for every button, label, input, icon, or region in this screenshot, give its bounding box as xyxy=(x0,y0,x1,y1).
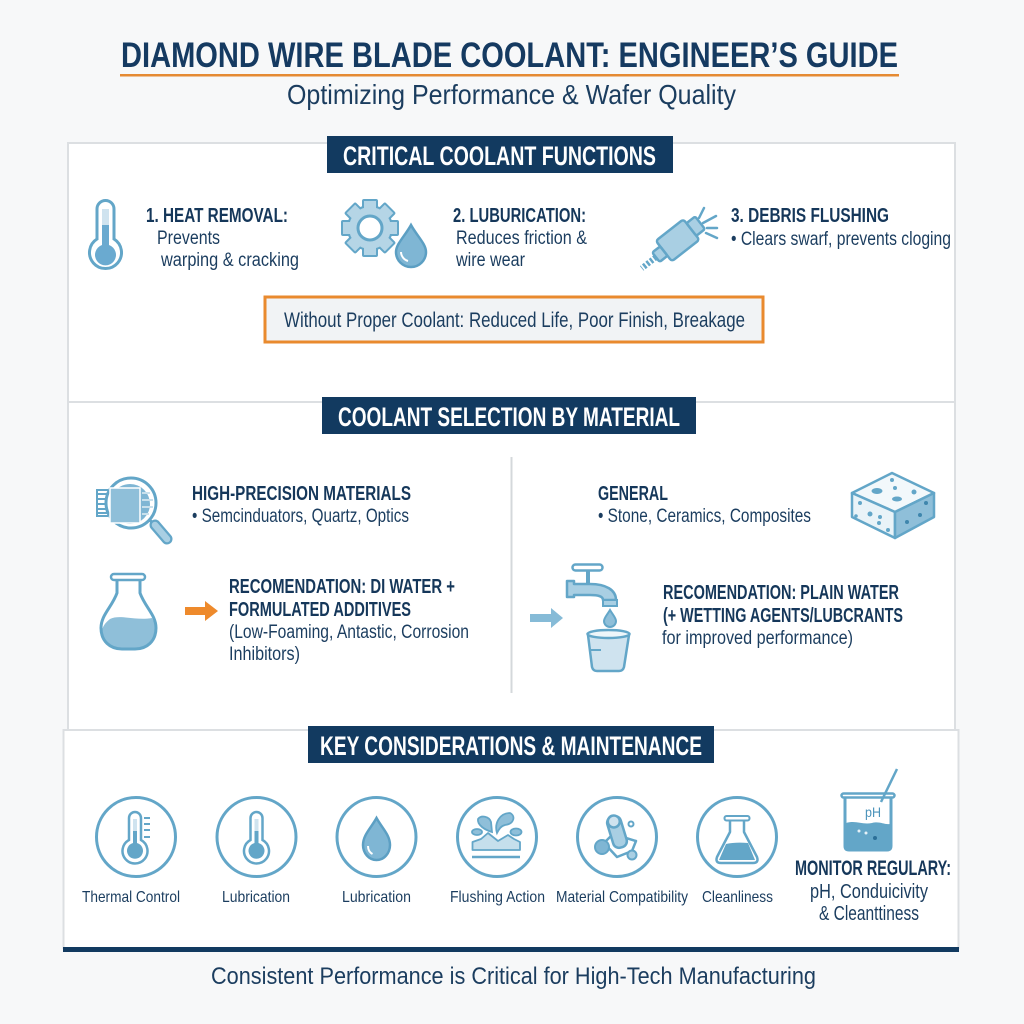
icon: thermometer xyxy=(90,200,122,269)
text: monitor regularly: & Cleanttiness xyxy=(819,903,919,925)
icon: gear and droplet xyxy=(343,201,426,267)
text: general: • Stone, Ceramics, Composites xyxy=(598,506,811,527)
text: recommendation plain water: for improved performance) xyxy=(662,628,853,649)
panel: key considerations and maintenance xyxy=(63,726,959,952)
text: heat removal: warping & cracking xyxy=(160,250,299,271)
item: cleanliness xyxy=(698,798,776,906)
text: debris flushing: • Clears swarf, prevents cloging xyxy=(731,229,951,250)
panel bottom bar xyxy=(63,947,959,952)
text: monitor regularly: MONITOR REGULARY: xyxy=(795,857,951,880)
text: monitor regularly: pH, Conduicivity xyxy=(810,881,928,903)
header: title and subtitle xyxy=(120,36,899,110)
panel box: selection xyxy=(68,402,955,730)
arrow: orange xyxy=(185,601,218,621)
arrow: blue xyxy=(530,608,563,628)
subtitle: Optimizing Performance & Wafer Quality xyxy=(287,79,736,110)
text: monitor regularly xyxy=(795,857,951,925)
panel: critical coolant functions xyxy=(68,136,955,402)
text: high-precision materials: HIGH-PRECISION MATERIALS xyxy=(192,483,411,505)
item: lubrication thermometer xyxy=(217,798,296,906)
text: debris flushing: 3. DEBRIS FLUSHING xyxy=(731,205,889,227)
icon: faucet and cup xyxy=(567,564,630,671)
title underline xyxy=(120,74,899,76)
item: thermal control xyxy=(82,798,180,906)
item: flushing action: Flushing Action xyxy=(450,889,545,906)
icon: spray nozzle xyxy=(634,208,717,279)
item: thermal control: Thermal Control xyxy=(82,889,180,906)
text: lubrication xyxy=(453,205,587,271)
item: material compatibility: Material Compatibility xyxy=(556,889,688,906)
icon: round flask xyxy=(101,574,156,649)
text: recommendation plain water: (+ WETTING AGENTS/LUBCRANTS xyxy=(663,605,903,627)
icon: porous block xyxy=(852,473,934,538)
item: cleanliness: Cleanliness xyxy=(702,889,773,906)
panel box: functions xyxy=(68,143,955,402)
heading: critical coolant functions: CRITICAL COOLANT FUNCTIONS xyxy=(343,141,656,171)
icon: beaker with pH probe: pH xyxy=(865,804,881,820)
text: recommendation DI water: RECOMENDATION: DI WATER + xyxy=(229,576,455,598)
text: recommendation DI water xyxy=(229,576,469,665)
item: lubrication droplet: Lubrication xyxy=(342,889,411,906)
text: recommendation DI water: (Low-Foaming, Antastic, Corrosion xyxy=(229,622,469,643)
callout: without proper coolant: Without Proper Coolant: Reduced Life, Poor Finish, Breakage xyxy=(284,309,745,332)
heading: key considerations and maintenance: KEY CONSIDERATIONS & MAINTENANCE xyxy=(320,731,702,761)
text: recommendation plain water: RECOMENDATION: PLAIN WATER xyxy=(663,582,899,604)
text: lubrication: wire wear xyxy=(455,250,526,271)
item: flushing action xyxy=(450,798,545,906)
item: lubrication droplet xyxy=(337,798,416,906)
text: lubrication: Reduces friction & xyxy=(456,228,587,249)
callout: without proper coolant xyxy=(265,297,763,342)
heading: coolant selection by material: COOLANT SELECTION BY MATERIAL xyxy=(338,402,680,432)
text: recommendation DI water: FORMULATED ADDITIVES xyxy=(229,599,411,621)
text: debris flushing xyxy=(731,205,951,250)
heading: key considerations and maintenance xyxy=(308,726,714,763)
text: recommendation plain water xyxy=(662,582,903,649)
panel: coolant selection by material xyxy=(68,397,955,730)
heading: coolant selection by material xyxy=(322,397,696,434)
icon: magnifier over chip xyxy=(97,478,167,539)
heading: critical coolant functions xyxy=(327,136,673,173)
panel box: considerations xyxy=(64,730,958,948)
text: heat removal xyxy=(146,205,299,271)
text: heat removal: Prevents xyxy=(157,228,220,249)
footer text: Consistent Performance is Critical for High-Tech Manufacturing xyxy=(211,963,816,990)
text: heat removal: 1. HEAT REMOVAL: xyxy=(146,205,288,227)
item: lubrication thermometer: Lubrication xyxy=(222,889,290,906)
text: general xyxy=(598,483,811,527)
text: general: GENERAL xyxy=(598,483,668,505)
icon: beaker with pH probe xyxy=(842,769,897,850)
item: material compatibility xyxy=(556,798,688,906)
text: recommendation DI water: Inhibitors) xyxy=(229,644,300,665)
text: lubrication: 2. LUBURICATION: xyxy=(453,205,586,227)
text: high-precision materials: • Semcinduators, Quartz, Optics xyxy=(192,506,409,527)
text: high-precision materials xyxy=(192,483,411,527)
